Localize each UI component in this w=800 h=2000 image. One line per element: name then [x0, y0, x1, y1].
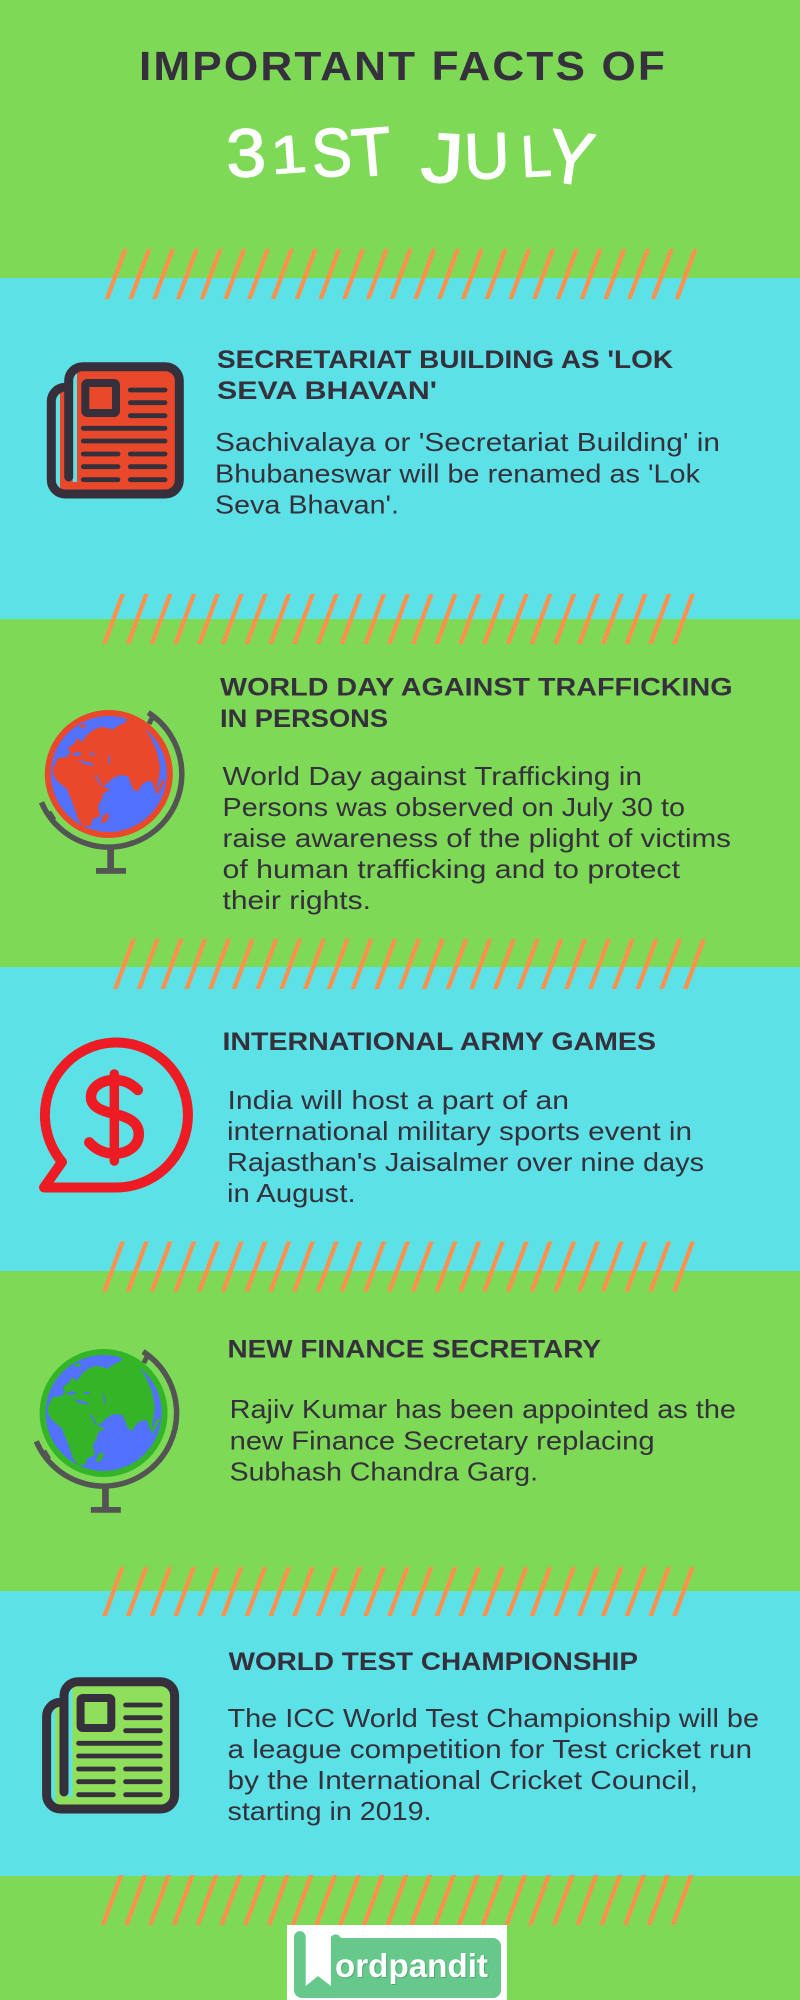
text: World Test Championship	[228, 1703, 759, 1826]
heading: Secretariat Building	[217, 346, 673, 405]
text: World Test Championship: a league competition for Test cricket run	[228, 1734, 752, 1764]
divider: stripes 1	[114, 249, 688, 299]
text: World Day: of human trafficking and to protect	[222, 854, 681, 884]
icon: green globe	[36, 1352, 177, 1513]
icon: red globe	[42, 713, 182, 874]
text: World Day: World Day against Trafficking in	[222, 761, 642, 791]
divider: stripes 2	[111, 594, 686, 644]
text: International Army Games	[227, 1085, 704, 1208]
logo: Wordpandit: ordpandit	[335, 1947, 488, 1984]
title: 31st July	[225, 113, 599, 203]
icon: dollar speech bubble	[44, 1043, 188, 1188]
text: International Army Games: Rajasthan's Jaisalmer over nine days	[227, 1147, 704, 1177]
heading: World Test Championship: WORLD TEST CHAMPIONSHIP	[229, 1648, 638, 1676]
text: World Test Championship: by the International Cricket Council,	[228, 1765, 698, 1795]
title: 31st July: J	[419, 117, 466, 198]
text: World Day: their rights.	[222, 885, 371, 915]
heading: World Day: IN PERSONS	[220, 705, 388, 733]
text: New Finance Secretary: Subhash Chandra Garg.	[230, 1457, 538, 1487]
title: 31st July: 1	[269, 123, 309, 186]
title: 31st July: L	[519, 123, 553, 189]
icon: green newspaper	[47, 1682, 175, 1809]
text: World Day: Persons was observed on July 30 to	[222, 792, 685, 822]
text: International Army Games: in August.	[227, 1178, 356, 1208]
text: Secretariat Building: Bhubaneswar will be renamed as 'Lok	[215, 458, 701, 488]
title: 31st July: S	[310, 113, 354, 192]
panel: header	[0, 0, 800, 278]
heading: Secretariat Building: SEVA BHAVAN'	[217, 377, 437, 405]
title: 31st July: T	[349, 113, 395, 192]
text: New Finance Secretary	[230, 1394, 736, 1487]
divider: stripes 4	[111, 1242, 686, 1292]
text: World Test Championship: The ICC World Test Championship will be	[228, 1703, 759, 1733]
title: 31st July: 3	[225, 114, 267, 192]
text: International Army Games: international military sports event in	[227, 1116, 692, 1146]
heading: World Day	[220, 674, 733, 733]
heading: World Day: WORLD DAY AGAINST TRAFFICKING	[220, 674, 733, 702]
panel: New Finance Secretary	[0, 1271, 800, 1591]
title: 31st July: Y	[543, 114, 599, 203]
heading: Secretariat Building: SECRETARIAT BUILDING AS 'LOK	[217, 346, 673, 374]
title: important facts of: IMPORTANT FACTS OF	[139, 43, 667, 89]
text: World Day	[222, 761, 731, 915]
panel: Secretariat Building	[0, 278, 800, 619]
text: New Finance Secretary: new Finance Secretary replacing	[230, 1426, 655, 1456]
text: Secretariat Building: Sachivalaya or 'Secretariat Building' in	[215, 427, 720, 457]
panel: International Army Games	[0, 967, 800, 1271]
heading: New Finance Secretary: NEW FINANCE SECRETARY	[228, 1336, 601, 1364]
icon: red newspaper	[51, 367, 179, 494]
text: World Day: raise awareness of the plight of victims	[222, 823, 731, 853]
title: 31st July: U	[463, 120, 511, 193]
logo: Wordpandit	[287, 1925, 507, 2000]
text: World Test Championship: starting in 2019.	[228, 1796, 432, 1826]
text: International Army Games: India will host a part of an	[228, 1085, 569, 1115]
divider: stripes 6	[110, 1875, 684, 1925]
panel: World Day against Trafficking	[0, 619, 800, 967]
divider: stripes 3	[122, 939, 697, 989]
panel: World Test Championship	[0, 1591, 800, 1876]
heading: International Army Games: INTERNATIONAL ARMY GAMES	[222, 1028, 656, 1056]
text: Secretariat Building: Seva Bhavan'.	[215, 490, 399, 520]
divider: stripes 5	[111, 1567, 686, 1616]
text: New Finance Secretary: Rajiv Kumar has been appointed as the	[230, 1394, 736, 1424]
text: Secretariat Building	[215, 427, 720, 520]
panel: footer	[0, 1876, 800, 2000]
